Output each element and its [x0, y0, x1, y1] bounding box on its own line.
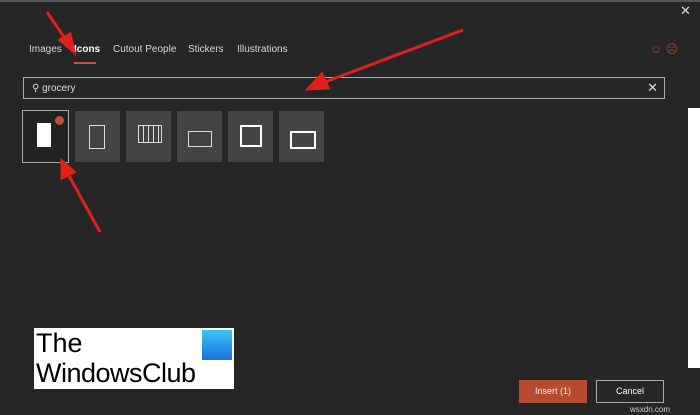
tabs: Illustrations [237, 44, 288, 55]
tabs: Icons [74, 44, 100, 55]
icon results [22, 110, 324, 163]
search box: ✕ [647, 80, 658, 95]
search box: ⚲ grocery [32, 83, 75, 94]
search box [23, 77, 665, 99]
scrollbar [688, 108, 700, 368]
close button: ✕ [680, 3, 691, 18]
tabs: Cutout People [113, 44, 176, 55]
logo [34, 328, 234, 389]
text: wsxdn.com [630, 405, 670, 414]
logo: The [36, 328, 83, 358]
tabs: Stickers [188, 44, 224, 55]
logo: WindowsClub [36, 358, 196, 388]
tabs [29, 44, 288, 64]
buttons [519, 380, 587, 403]
text: Cancel [616, 386, 644, 396]
tabs: Images [29, 44, 62, 55]
feedback icons: ☺ ☹ [650, 42, 678, 56]
buttons: Insert (1) [535, 386, 571, 396]
